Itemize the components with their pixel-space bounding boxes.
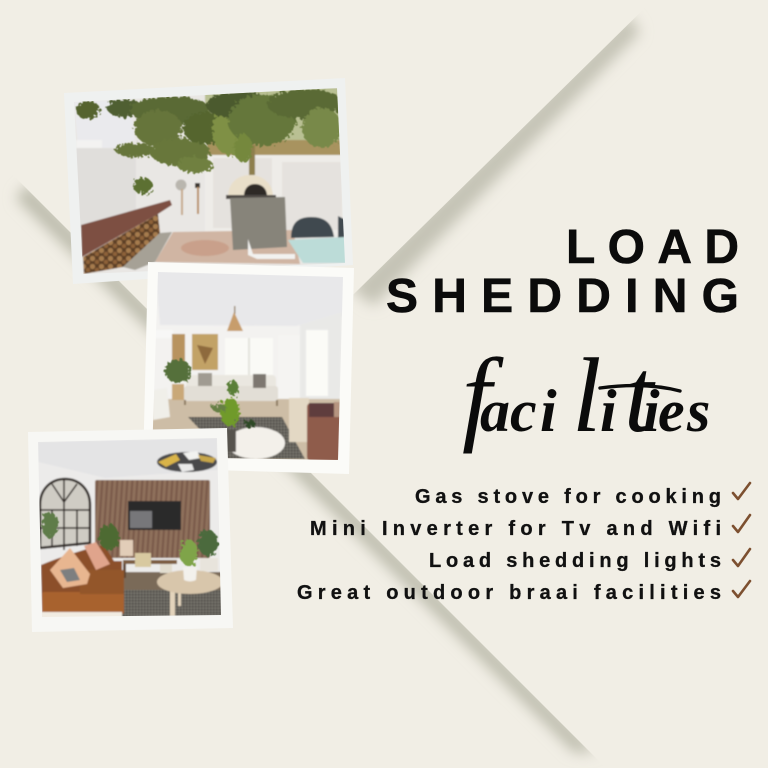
photo: outdoor braai area	[64, 78, 353, 284]
list item: braai: Great outdoor braai facilities	[297, 582, 721, 604]
script heading: facilities: l	[572, 337, 601, 454]
check: gas stove	[733, 483, 750, 499]
diagonal fold shadow: upper right	[350, 15, 640, 306]
check marks	[733, 483, 750, 597]
script heading: facilities: e	[658, 378, 685, 444]
leather sofa	[41, 542, 124, 614]
coffee table	[157, 567, 223, 616]
list item: inverter: Mini Inverter for Tv and Wifi	[310, 518, 721, 540]
ceiling light	[157, 451, 217, 472]
script heading: facilities: t	[624, 337, 656, 454]
script heading: facilities	[462, 337, 710, 454]
check: braai	[733, 581, 750, 597]
pendant lamp	[227, 306, 243, 331]
photo: lounge with TV wall	[28, 428, 233, 632]
script heading: facilities: s	[686, 378, 710, 444]
TV	[128, 501, 181, 530]
photo: living room with sofa	[143, 262, 354, 474]
diagonal fold shadow: lower left	[16, 184, 596, 752]
leather armchair	[307, 402, 340, 461]
list item: lights: Load shedding lights	[429, 550, 721, 572]
script heading: facilities: a	[480, 378, 510, 444]
title: SHEDDING: SHEDDING	[386, 270, 739, 323]
tools on wall	[176, 180, 200, 215]
title: LOAD: LOAD	[566, 221, 739, 274]
check: lights	[733, 549, 750, 566]
sofa	[184, 373, 278, 406]
script heading: facilities: f	[462, 337, 504, 454]
list item: gas stove: Gas stove for cooking	[415, 486, 721, 508]
check: inverter	[733, 515, 750, 532]
script heading: facilities: i	[600, 378, 617, 444]
console	[120, 540, 177, 578]
tree foliage	[76, 89, 343, 194]
arched mirror	[40, 479, 90, 550]
script heading: facilities: i	[643, 378, 660, 444]
script heading: facilities: i	[540, 378, 557, 444]
feature list	[297, 486, 721, 604]
script heading: facilities: c	[510, 378, 537, 444]
